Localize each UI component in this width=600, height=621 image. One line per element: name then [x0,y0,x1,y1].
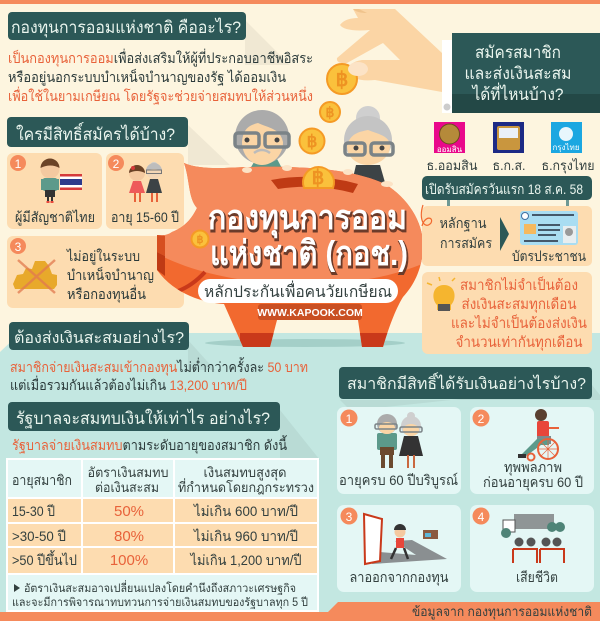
subtitle ribbon: หลักประกันเพื่อคนวัยเกษียณ [204,280,392,301]
lower teal background [0,333,600,621]
application evidence card: บัตรประชาชน [512,248,586,264]
heading: government matching [8,402,280,431]
title text: กองทุนการออม [209,201,408,241]
intro paragraph: หรืออยู่นอกระบบบำเหน็จบำนาญของรัฐ ได้ออมเงิน [8,68,286,86]
logo: GSB: ออมสิน [437,145,463,154]
card 2: age 15-60 [106,153,184,229]
contribution paragraph: แต่เมื่อรวมกันแล้วต้องไม่เกิน 13,200 บาท/ปี [10,376,247,393]
falling coin 1 [320,102,340,122]
application evidence card [422,206,592,266]
heading: government matching: รัฐบาลจะสมทบเงินให้เท่าไร อย่างไร? [16,408,270,429]
benefit card 2: disability: ก่อนอายุครบ 60 ปี [483,474,583,491]
benefit card 4: death: เสียชีวิต [516,569,558,585]
heading: where to apply: สมัครสมาชิก [475,43,561,62]
benefit card 3: resignation: 3 [346,510,353,524]
table intro: รัฐบาลจ่ายเงินสมทบตามระดับอายุของสมาชิก ดังนี้ [12,435,287,454]
heading: who can apply: ใครมีสิทธิ์สมัครได้บ้าง? [16,122,175,144]
coin on pig [192,230,208,248]
matching table: ไม่เกิน 600 บาท/ปี [193,503,298,519]
intro paragraph [8,49,313,105]
heading: what is the fund: กองทุนการออมแห่งชาติ คืออะไร? [11,17,241,38]
benefit card 1: age 60 [337,407,461,494]
tip card: ส่งเงินสะสมทุกเดือน [462,296,577,313]
card 3: not in pension scheme: ไม่อยู่ในระบบ [66,248,140,265]
benefit card 2: disability: 2 [478,412,485,426]
heading: where to apply: ได้ที่ไหนบ้าง? [471,82,564,104]
matching table: อัตราเงินสมทบ [88,465,168,480]
heading: entitlements [339,367,592,399]
coin in fingers: ฿ [336,69,348,91]
tip card: จำนวนเท่ากันทุกเดือน [456,334,583,351]
benefit card 3: resignation [337,505,461,592]
matching table: 100% [110,552,148,569]
coin entering slot [303,167,334,189]
application evidence card: การสมัคร [440,235,492,251]
benefit card 2: disability [470,407,594,494]
matching table: 15-30 ปี [12,503,55,519]
matching table: >50 ปีขึ้นไป [12,550,77,568]
tip card: และไม่จำเป็นต้องส่งเงิน [451,313,587,332]
card 2: age 15-60: อายุ 15-60 ปี [111,209,179,226]
matching table [6,458,319,612]
pig hands of elders [242,165,393,187]
matching table: อายุสมาชิก [12,472,72,489]
benefit card 1: age 60: อายุครบ 60 ปีบริบูรณ์ [339,472,458,489]
title text: แห่งชาติ (กอช.) [210,235,408,273]
heading: what is the fund [8,12,246,40]
benefit card 3: resignation: ลาออกจากกองทุน [350,569,449,586]
header shadows [188,20,600,460]
card 2: age 15-60: 2 [113,157,120,171]
coin on pig: ฿ [196,234,204,246]
heading: how to contribute [9,322,189,350]
card 1: Thai nationality: 1 [15,157,22,171]
piggy bank [150,160,430,350]
heading: who can apply [7,117,188,147]
card 3: not in pension scheme: หรือกองทุนอื่น [67,285,146,303]
logo: BAAC: ธ.ก.ส. [492,158,526,173]
benefit card 1: age 60: 1 [346,412,353,426]
logo: GSB [426,122,478,173]
matching table: ไม่เกิน 1,200 บาท/ปี [190,552,302,568]
card 1: Thai nationality [7,153,102,229]
coin in fingers [327,64,357,94]
card 3: not in pension scheme: บำเหน็จบำนาญ [67,266,154,283]
ground shadow [205,339,405,347]
heading: where to apply [442,33,600,113]
matching table: 80% [114,528,144,545]
coin entering slot: ฿ [312,167,324,189]
card 3: not in pension scheme: 3 [15,240,22,254]
bottom bar [0,602,600,621]
logo: Krungthai [542,122,594,174]
falling coin 2 [300,128,324,154]
coin slot [271,177,358,193]
intro paragraph: เพื่อใช้ในยามเกษียณ โดยรัฐจะช่วยจ่ายสมทบให้ส่วนหนึ่ง [8,87,313,105]
matching table: และจะมีการพิจารณาทบทวนการจ่ายเงินสมทบของรัฐบาลทุก 5 ปี [12,596,308,609]
heading: entitlements: สมาชิกมีสิทธิ์ได้รับเงินอย่างไรบ้าง? [347,372,586,393]
matching table: ต่อเงินสะสม [95,480,159,495]
grandmother [344,106,393,186]
thumb [348,62,368,76]
logo: Krungthai: ธ.กรุงไทย [542,158,594,174]
contribution paragraph: สมาชิกจ่ายเงินสะสมเข้ากองทุนไม่ต่ำกว่าครั้งละ 50 บาท [10,357,308,376]
title text [208,199,409,275]
hand [337,9,442,92]
benefit card 4: death [470,505,594,592]
logo: GSB: ธ.ออมสิน [426,158,478,173]
falling coin 1: ฿ [326,104,335,120]
tip card [422,272,592,354]
benefit card 4: death: 4 [478,510,485,524]
loop of string [421,205,432,226]
title text: กองทุนการออม [208,199,407,239]
website tag: WWW.KAPOOK.COM [257,307,363,319]
source line: ข้อมูลจาก กองทุนการออมแห่งชาติ [412,604,592,620]
card 3: not in pension scheme [7,236,184,308]
tip card: สมาชิกไม่จำเป็นต้อง [460,275,578,294]
logo: Krungthai: กรุงไทย [552,143,580,152]
matching table: เงินสมทบสูงสุด [204,465,286,481]
falling coin 2: ฿ [307,132,318,151]
matching table: ไม่เกิน 960 บาท/ปี [193,528,298,544]
intro paragraph: เป็นกองทุนการออมเพื่อส่งเสริมให้ผู้ที่ประกอบอาชีพอิสระ [8,49,313,67]
top bar [0,0,600,4]
grandfather [235,110,289,174]
application evidence card: หลักฐาน [440,215,487,232]
logo: BAAC [492,122,526,173]
matching table: อัตราเงินสะสมอาจเปลี่ยนแปลงโดยคำนึงถึงสภาวะเศรษฐกิจ [24,580,296,595]
opening date pill [422,176,592,206]
matching table: >30-50 ปี [12,528,66,544]
contribution paragraph [10,357,308,393]
card 1: Thai nationality: ผู้มีสัญชาติไทย [15,209,95,226]
matching table: ที่กำหนดโดยกฎกระทรวง [178,478,314,495]
subtitle ribbon [198,279,398,303]
heading: how to contribute: ต้องส่งเงินสะสมอย่างไร? [14,328,184,347]
heading: where to apply: และส่งเงินสะสม [464,64,572,83]
title text: แห่งชาติ (กอช.) [211,237,409,275]
matching table: 50% [114,503,144,520]
benefit card 2: disability: ทุพพลภาพ [504,459,562,476]
